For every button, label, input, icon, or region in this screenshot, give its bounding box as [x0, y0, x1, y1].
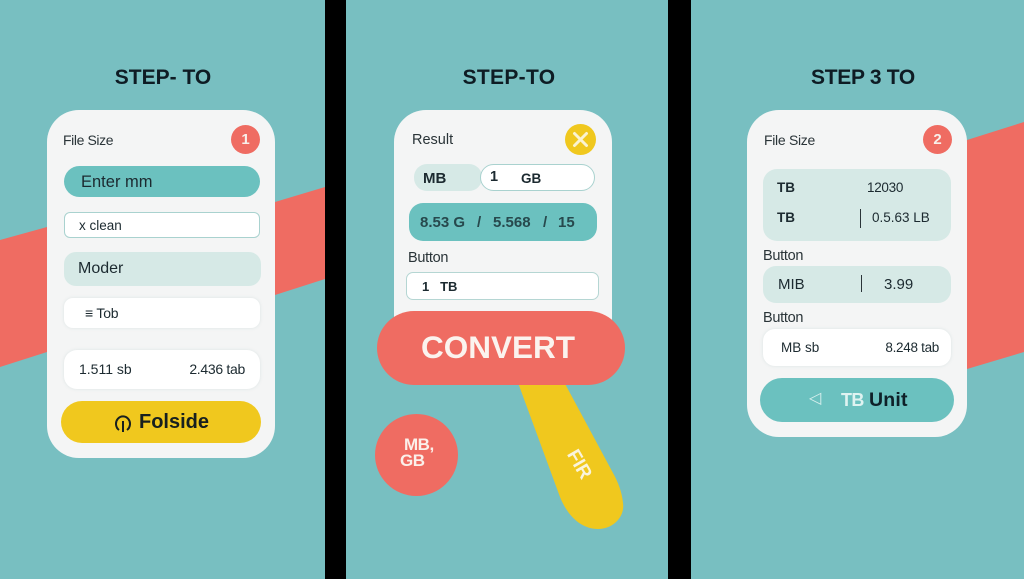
row: moder: Moder — [78, 260, 123, 277]
badge: mb gb: MB, — [404, 435, 434, 454]
badge: number one — [231, 125, 260, 154]
button: tb unit: TB — [841, 390, 864, 410]
result values: 8.53 G — [420, 214, 465, 231]
input: clean — [64, 212, 260, 238]
result values — [409, 203, 597, 241]
badge: mb gb — [375, 414, 458, 496]
table: tb values: 12030 — [867, 180, 903, 195]
table: tb values: 0.5.63 LB — [872, 210, 930, 225]
input: enter mm: Enter mm — [81, 173, 153, 191]
row: mib — [763, 266, 951, 303]
heading: step three: STEP 3 TO — [811, 66, 915, 89]
result values: 5.568 — [493, 214, 531, 231]
icon: power — [115, 415, 131, 432]
button: tb unit — [760, 378, 954, 422]
label: file size: File Size — [63, 132, 113, 148]
row: tab — [64, 298, 260, 328]
button: convert — [377, 311, 625, 385]
heading: step one: STEP- TO — [115, 66, 211, 89]
input: one gb: 1 — [490, 169, 498, 185]
input: one tb: 1 TB — [422, 279, 457, 294]
tail label: FIR — [562, 446, 596, 483]
card: step two — [394, 110, 612, 350]
input: one gb: GB — [521, 171, 541, 186]
input: clean: x clean — [79, 218, 122, 233]
input: one tb — [406, 272, 599, 300]
button: folside: Folside — [139, 411, 209, 433]
button: convert: CONVERT — [421, 329, 575, 365]
badge: number one: 1 — [241, 131, 250, 148]
result values: 15 — [558, 214, 575, 231]
unit: mb — [414, 164, 482, 191]
badge: number two: 2 — [933, 131, 942, 148]
button: folside — [61, 401, 261, 443]
tail: fir — [518, 385, 624, 529]
row: mib: MIB — [778, 276, 805, 293]
card: step one — [47, 110, 275, 458]
badge: number two — [923, 125, 952, 154]
card: step three — [747, 110, 967, 437]
row: size values: 2.436 tab — [189, 361, 245, 377]
result values: / — [543, 214, 547, 231]
row: size values — [763, 329, 951, 366]
label: button: Button — [763, 248, 803, 264]
row: size values: 1.511 sb — [79, 361, 132, 377]
table: tb values: TB — [777, 180, 795, 195]
table: tb values: TB — [777, 210, 795, 225]
label: button: Button — [408, 250, 448, 266]
input: enter mm — [64, 166, 260, 197]
label: result: Result — [412, 132, 453, 148]
row: tab: ≡ Tob — [85, 305, 118, 321]
button: tb unit: ◁ — [809, 390, 821, 407]
row: moder — [64, 252, 261, 286]
row: size values — [64, 350, 260, 389]
result values: / — [477, 214, 481, 231]
button: tb unit: Unit — [869, 389, 908, 411]
unit: mb: MB — [423, 170, 446, 187]
row: size values: 8.248 tab — [885, 340, 939, 355]
input: one gb — [480, 164, 595, 191]
panel: step two — [375, 66, 625, 529]
badge: mb gb: GB — [400, 451, 424, 470]
panel: step one — [47, 66, 275, 458]
row: size values: MB sb — [781, 340, 819, 355]
heading: step two: STEP-TO — [463, 66, 555, 89]
badge: close — [565, 124, 596, 154]
table: tb values — [763, 169, 951, 241]
label: file size: File Size — [764, 132, 815, 148]
panel: step three — [747, 66, 967, 437]
label: button: Button — [763, 310, 803, 326]
row: mib: 3.99 — [884, 276, 913, 293]
